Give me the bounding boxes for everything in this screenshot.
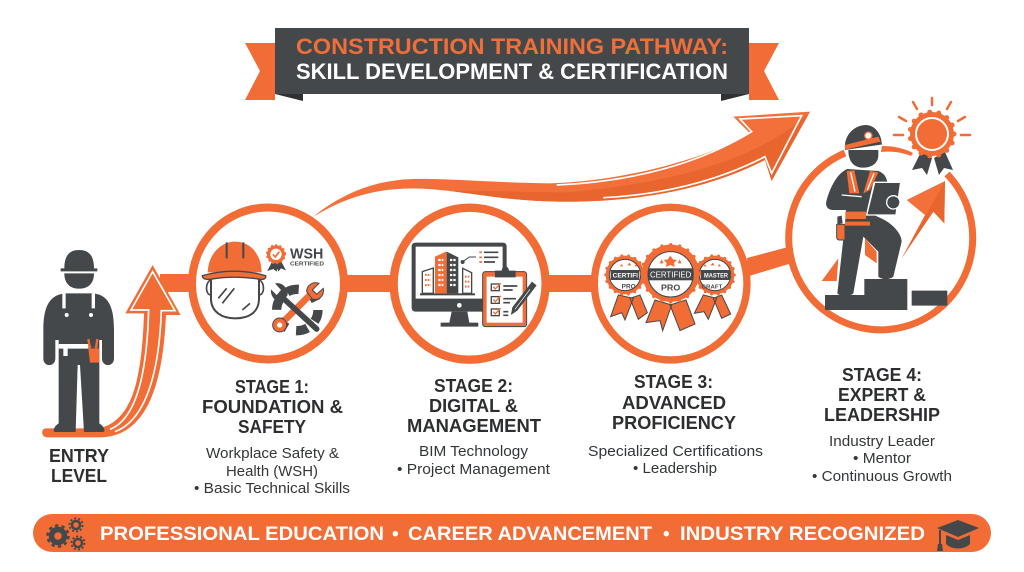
certification badge centre: PRO bbox=[661, 283, 681, 293]
stage 4 text: LEADERSHIP bbox=[824, 405, 940, 425]
stage 3 text: ADVANCED bbox=[622, 393, 726, 413]
stage 2 text: • Project Management bbox=[397, 461, 551, 478]
stage 3 text: PROFICIENCY bbox=[612, 413, 736, 433]
stage 3 circle bbox=[594, 207, 747, 360]
entry level figure bbox=[42, 250, 181, 437]
icon: gears bbox=[48, 518, 84, 550]
worker with tablet bbox=[826, 125, 902, 296]
title banner: SKILL DEVELOPMENT & CERTIFICATION bbox=[296, 59, 728, 84]
stage 1 text: SAFETY bbox=[238, 417, 306, 437]
title banner: CONSTRUCTION TRAINING PATHWAY: bbox=[296, 34, 728, 59]
WSH certified badge: WSH bbox=[290, 246, 323, 262]
stage 3 text: STAGE 3: bbox=[634, 372, 713, 392]
stage 4 text: • Mentor bbox=[853, 450, 911, 467]
stage 2 text: DIGITAL & bbox=[429, 396, 518, 416]
stage 2 circle bbox=[394, 208, 546, 360]
stage 4 text: EXPERT & bbox=[838, 385, 926, 405]
growth arrow bbox=[822, 181, 945, 281]
bottom banner: INDUSTRY RECOGNIZED bbox=[680, 524, 925, 545]
big rising arrow bbox=[313, 112, 810, 217]
steps bbox=[825, 279, 947, 310]
stage 4 text bbox=[812, 365, 952, 485]
WSH certified badge: CERTIFIED bbox=[290, 261, 324, 267]
certification badge left: PRO bbox=[622, 284, 636, 291]
stage 1 text: Health (WSH) bbox=[226, 463, 318, 480]
certification badge centre bbox=[642, 245, 699, 331]
connector lines between stages bbox=[160, 246, 792, 292]
stage 4 circle bbox=[789, 98, 973, 330]
stage 4 text: STAGE 4: bbox=[842, 365, 922, 385]
certification badge centre: CERTIFIED bbox=[650, 270, 692, 279]
stage 1 text bbox=[194, 377, 350, 497]
bottom banner: CAREER ADVANCEMENT bbox=[408, 524, 652, 545]
entry level label: LEVEL bbox=[51, 466, 107, 486]
WSH certified badge bbox=[267, 245, 324, 272]
base and rising arrow bbox=[42, 265, 181, 437]
gear and wrenches bbox=[271, 283, 323, 332]
stage 2 text bbox=[397, 376, 551, 478]
award medal bbox=[894, 98, 970, 175]
bottom banner: PROFESSIONAL EDUCATION bbox=[100, 524, 384, 545]
certification badge right bbox=[694, 256, 734, 319]
stage 4 text: • Continuous Growth bbox=[812, 468, 952, 485]
bottom banner: • bbox=[392, 524, 399, 545]
stage 1 text: FOUNDATION & bbox=[202, 397, 343, 417]
certification badge right: CRAFT bbox=[702, 285, 723, 291]
certification badge left: CERTIFI bbox=[613, 272, 638, 279]
icon: graduation cap bbox=[937, 520, 979, 551]
title banner bbox=[245, 28, 779, 101]
stage 1 text: • Basic Technical Skills bbox=[194, 480, 350, 497]
certification badge left bbox=[606, 256, 647, 320]
clipboard bbox=[483, 266, 537, 327]
stage 3 text: Specialized Certifications bbox=[588, 443, 763, 460]
bottom banner: • bbox=[663, 524, 670, 545]
stage 1 text: STAGE 1: bbox=[235, 377, 309, 397]
monitor with building bbox=[412, 243, 507, 327]
stage 4 text: Industry Leader bbox=[829, 433, 935, 450]
stage 2 text: BIM Technology bbox=[419, 443, 529, 460]
entry level label bbox=[49, 446, 109, 486]
bottom banner bbox=[33, 514, 991, 552]
stage 1 text: Workplace Safety & bbox=[206, 445, 339, 462]
stage 3 text bbox=[588, 372, 763, 477]
stage 3 text: • Leadership bbox=[633, 460, 717, 477]
entry level label: ENTRY bbox=[49, 446, 109, 466]
helmet and visor bbox=[202, 242, 266, 318]
certification badge right: MASTER bbox=[704, 272, 728, 279]
stage 2 text: STAGE 2: bbox=[434, 376, 513, 396]
stage 2 text: MANAGEMENT bbox=[407, 416, 541, 436]
worker bbox=[43, 250, 114, 432]
stage 1 circle bbox=[192, 208, 344, 360]
